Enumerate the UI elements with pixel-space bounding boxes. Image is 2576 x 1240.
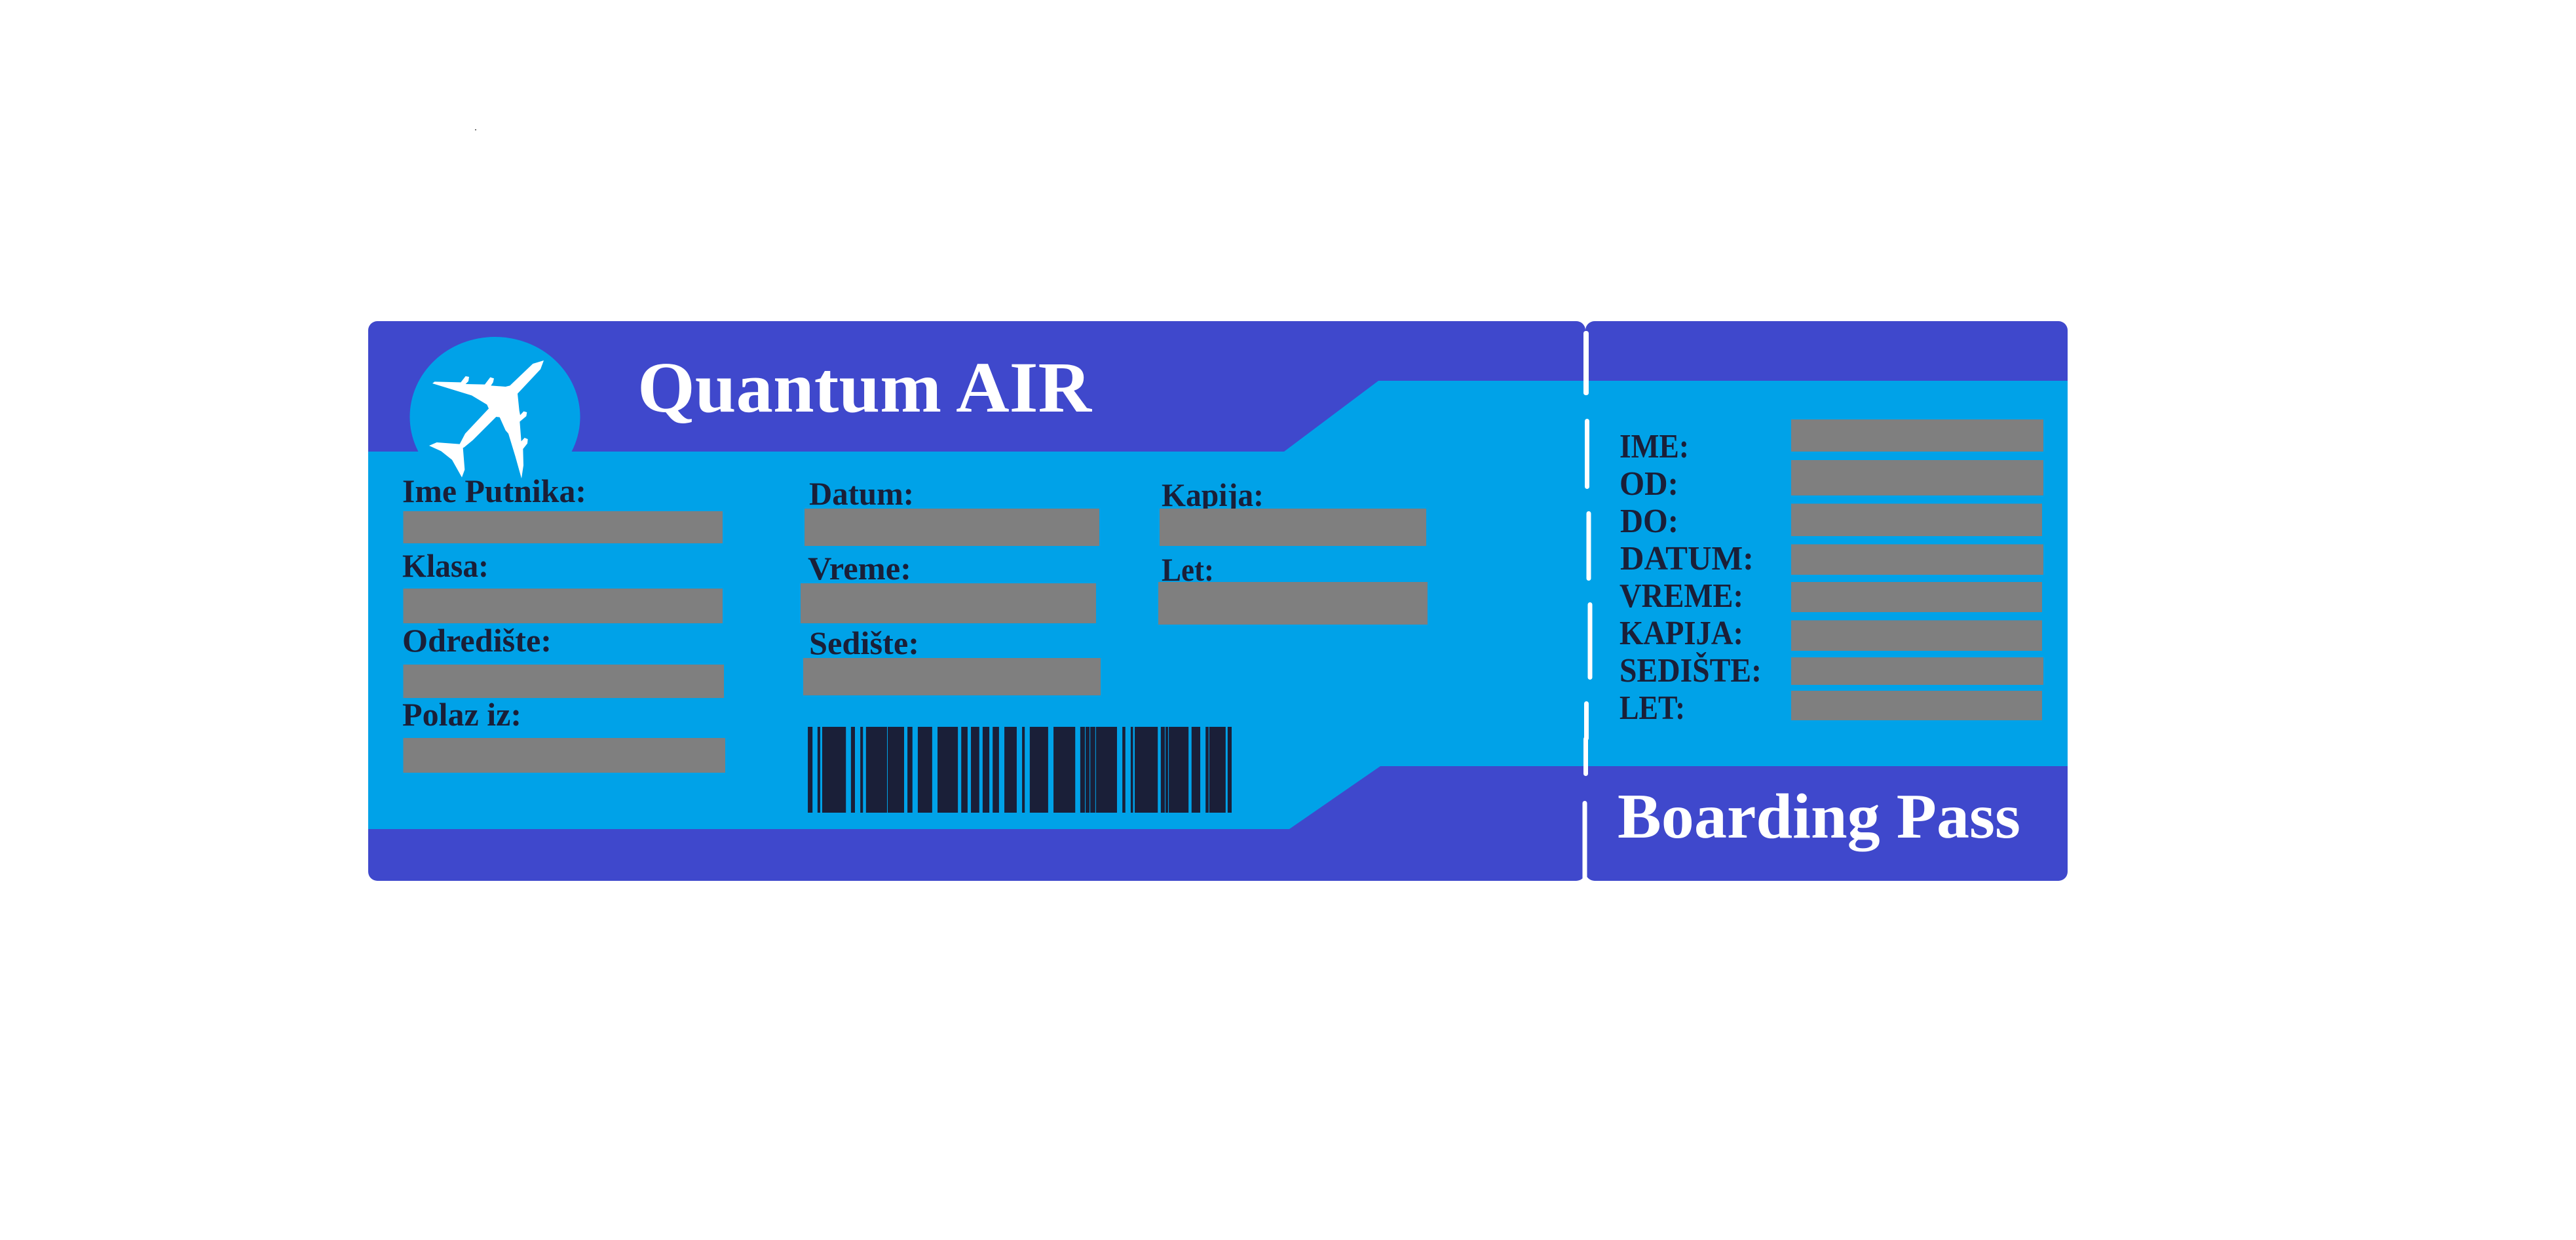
- label: Sedište: Sedište:: [809, 625, 919, 661]
- stub label: SEDIŠTE: SEDIŠTE:: [1619, 651, 1762, 689]
- ticket purple stub body: [1585, 321, 2068, 881]
- icon: airplane: [429, 360, 544, 478]
- stub label: IME: IME:: [1619, 428, 1689, 465]
- stub label: VREME: VREME:: [1619, 577, 1743, 615]
- field: Polaz iz: [404, 738, 725, 773]
- stub field: KAPIJA: [1791, 620, 2042, 651]
- title: Quantum AIR: Quantum AIR: [637, 347, 1093, 427]
- cyan content band: [368, 381, 2068, 829]
- stub label: DO: DO:: [1620, 503, 1678, 540]
- label: Polaz iz: Polaz iz:: [402, 696, 521, 733]
- label: Vreme: Vreme:: [808, 550, 911, 587]
- fields column 3: [1158, 476, 1428, 625]
- label: Ime Putnika: Ime Putnika:: [402, 473, 586, 509]
- perforated tear line: [1583, 331, 1592, 880]
- stub field: DO: [1791, 503, 2042, 536]
- stub field: VREME: [1791, 582, 2042, 612]
- barcode: [808, 727, 1232, 813]
- field: Kapija: [1160, 509, 1426, 546]
- field: Ime Putnika: [404, 511, 723, 543]
- field: Odredište: [404, 665, 724, 698]
- stub label: DATUM: DATUM:: [1620, 540, 1754, 577]
- field: Vreme: [801, 583, 1096, 623]
- label: Odredište: Odredište:: [402, 622, 552, 659]
- stub label: LET: LET:: [1619, 689, 1685, 727]
- label: Kapija: Kapija:: [1162, 476, 1264, 513]
- field: Sedište: [803, 658, 1101, 695]
- stub field: IME: [1791, 419, 2043, 452]
- stub label: KAPIJA: KAPIJA:: [1619, 615, 1743, 652]
- boarding pass ticket: [368, 321, 2068, 881]
- label: Klasa: Klasa:: [402, 547, 489, 584]
- stub field: OD: [1791, 460, 2043, 495]
- label: Let: Let:: [1162, 551, 1214, 588]
- fields column 1: [402, 473, 725, 773]
- field: Let: [1158, 582, 1428, 625]
- field: Klasa: [404, 589, 723, 623]
- field: Datum: [805, 509, 1099, 546]
- stub field: SEDIŠTE: [1791, 657, 2043, 685]
- fields column 2: [801, 475, 1101, 695]
- logo circle: [410, 337, 580, 497]
- stub fields: [1619, 419, 2043, 727]
- stub label: OD: OD:: [1619, 465, 1678, 503]
- ticket purple main body: [368, 321, 1585, 881]
- stub field: LET: [1791, 691, 2042, 720]
- stub field: DATUM: [1791, 544, 2043, 575]
- label: Datum: Datum:: [809, 475, 914, 512]
- heading: Boarding Pass: Boarding Pass: [1618, 781, 2020, 852]
